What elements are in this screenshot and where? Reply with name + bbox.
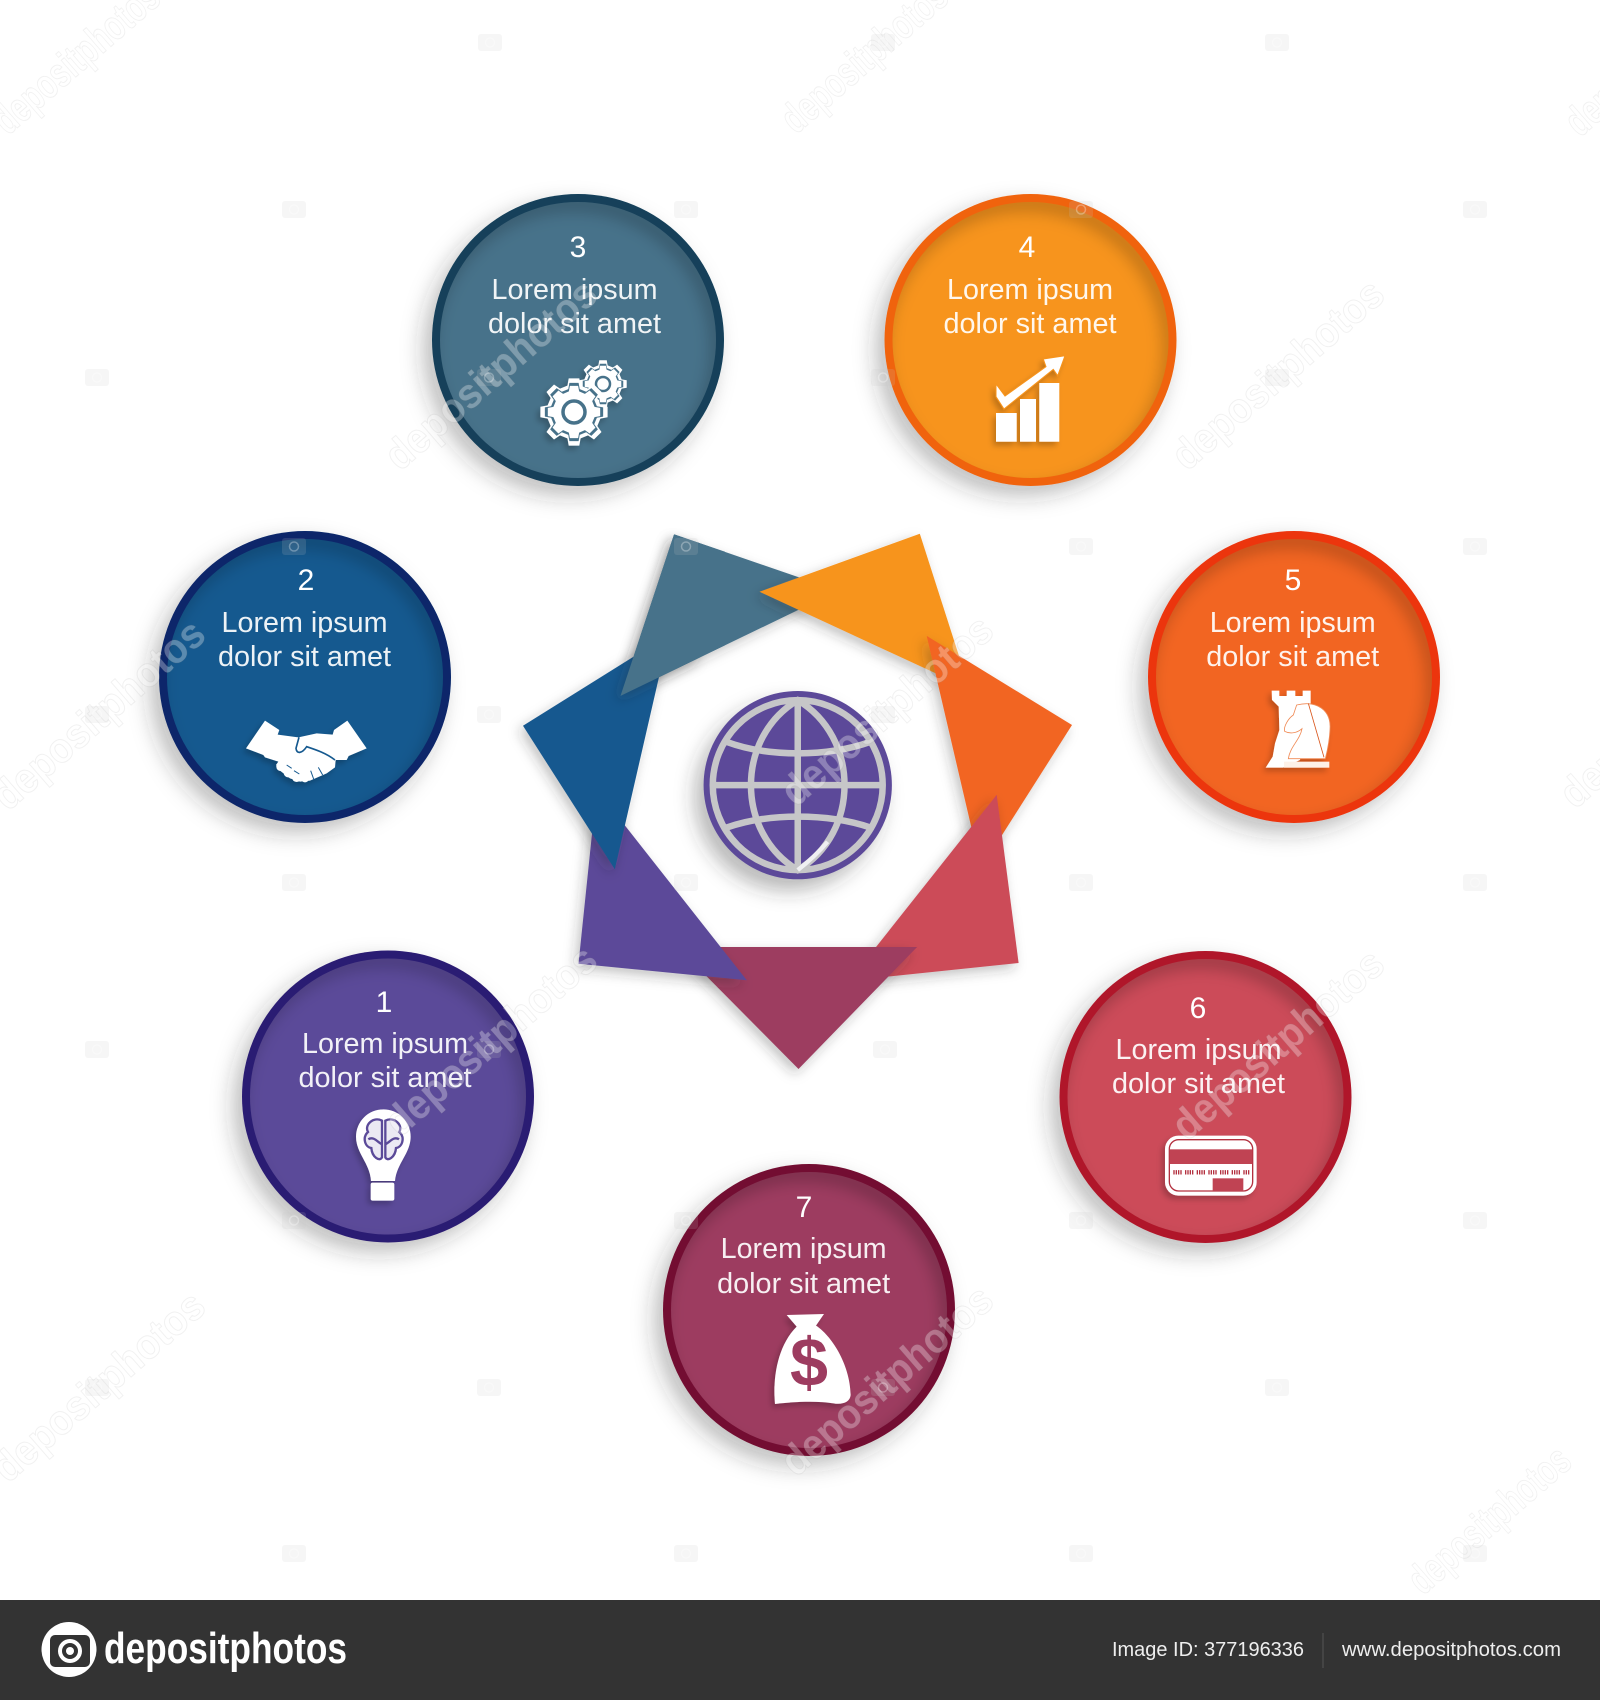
label: [1206, 607, 1379, 673]
label: [944, 274, 1116, 340]
label: [717, 1233, 890, 1300]
disc: [658, 1164, 955, 1465]
watermark: repeated diagonal wordmark: depositphotos: [1162, 269, 1393, 479]
triangle: purple: [578, 790, 747, 980]
disc: [427, 194, 724, 495]
image id: Image ID: 377196336: [1112, 1639, 1304, 1661]
panel: step 1: [237, 950, 534, 1252]
label: Lorem ipsum: [1116, 1034, 1282, 1066]
triangle: orange-red: [927, 636, 1072, 868]
panel: step 6: [1054, 951, 1352, 1252]
disc: [1054, 951, 1352, 1252]
icon: chess rook and knight: [1266, 691, 1330, 768]
triangle: teal overlap tip: [620, 534, 700, 696]
watermark: small camera marks: [85, 34, 1487, 1562]
website: www.depositphotos.com: [1341, 1639, 1561, 1661]
label: Lorem ipsum: [222, 607, 388, 639]
triangle: red: [849, 795, 1019, 981]
icon: central globe: [704, 691, 892, 879]
label: dolor sit amet: [944, 308, 1116, 340]
icon: handshake: [246, 721, 367, 782]
label: dolor sit amet: [298, 1062, 472, 1094]
icon: depositphotos camera logo: [42, 1622, 96, 1677]
disc: [154, 531, 451, 832]
footer bar: [0, 1600, 1600, 1700]
icon: light bulb with brain: [356, 1109, 411, 1201]
footer wordmark: depositphotos: [104, 1624, 347, 1673]
label: Lorem ipsum: [721, 1233, 887, 1265]
label: dolor sit amet: [488, 308, 661, 340]
icon: rising bar chart: [996, 356, 1065, 442]
step number: 4: [1019, 231, 1035, 264]
label: [1112, 1034, 1285, 1100]
icon: money bag: $: [790, 1325, 828, 1401]
label: Lorem ipsum: [1210, 607, 1376, 639]
step number: 2: [298, 564, 314, 597]
panel: step 2: [154, 531, 451, 832]
watermark: repeated diagonal wordmark: depositphotos: [375, 935, 606, 1145]
watermark: repeated diagonal wordmark: depositphotos: [771, 1275, 1002, 1485]
step number: 3: [570, 231, 586, 264]
disc: [1143, 531, 1440, 832]
star of seven triangles: [523, 534, 1072, 1069]
triangle: blue: [523, 635, 669, 869]
panel: step 4: [880, 194, 1176, 495]
disc: [880, 194, 1176, 495]
label: Lorem ipsum: [947, 274, 1113, 306]
panel: step 3: [427, 194, 724, 495]
label: Lorem ipsum: [302, 1028, 468, 1060]
watermark: repeated diagonal wordmark: depositphotos: [771, 605, 1002, 815]
panel: step 7: [658, 1164, 955, 1465]
label: [298, 1028, 472, 1094]
label: dolor sit amet: [717, 1268, 890, 1300]
disc: [237, 950, 534, 1252]
step number: 7: [796, 1191, 812, 1224]
label: [218, 607, 391, 673]
icon: money bag: [774, 1314, 851, 1404]
watermark: repeated diagonal wordmark: depositphotos: [375, 269, 606, 479]
icon: credit card: [1165, 1136, 1257, 1196]
step number: 1: [376, 986, 392, 1019]
label: dolor sit amet: [1206, 641, 1379, 673]
triangle: teal: [620, 534, 838, 696]
icon: gears: [540, 360, 627, 446]
label: dolor sit amet: [1112, 1068, 1285, 1100]
triangle: teal seam cover: [640, 534, 725, 686]
label: dolor sit amet: [218, 641, 391, 673]
watermark: repeated diagonal wordmark: depositphotos: [1162, 939, 1393, 1149]
step number: 6: [1190, 992, 1206, 1025]
panel: step 5: [1143, 531, 1440, 832]
triangle: orange: [760, 534, 970, 689]
label: [488, 274, 661, 340]
step number: 5: [1285, 564, 1301, 597]
triangle: maroon: [678, 947, 917, 1069]
label: Lorem ipsum: [492, 274, 658, 306]
